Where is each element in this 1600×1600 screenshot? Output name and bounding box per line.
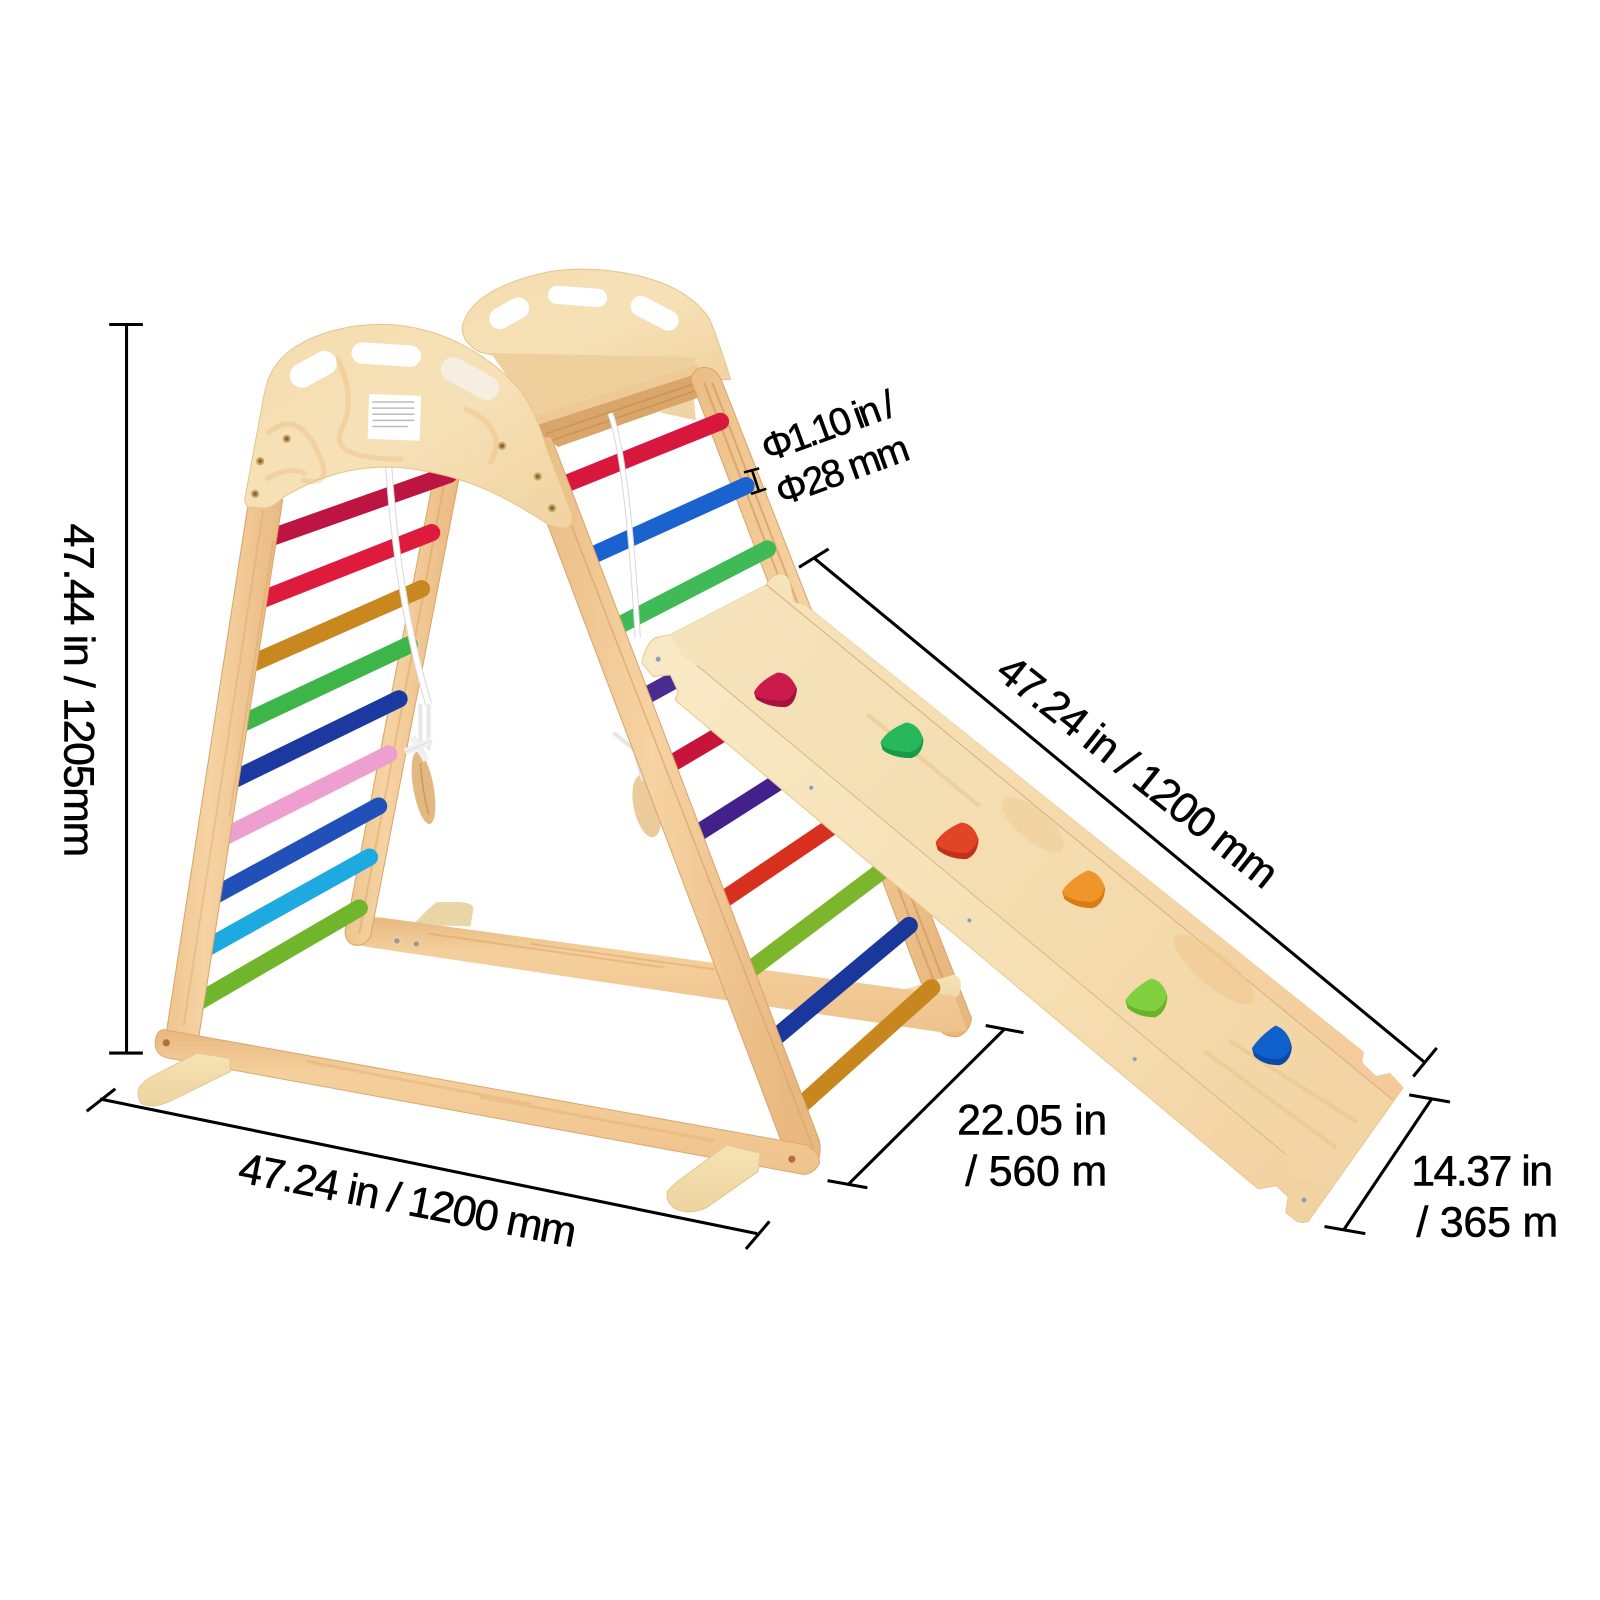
front bottom bar: [155, 1030, 819, 1174]
dimension: height: [54, 324, 143, 1053]
holds: [754, 672, 1292, 1065]
right foot: [667, 1145, 760, 1212]
height label: 47.44 in / 1205mm: [54, 523, 102, 857]
front right leg: [541, 437, 820, 1171]
dimension: base length: [87, 1089, 769, 1257]
hold: red-orange: [936, 822, 979, 859]
depth label: [957, 1097, 1107, 1196]
ramp grain: [867, 714, 1357, 1148]
dimension: depth: [828, 1026, 1107, 1196]
climbing ramp: [642, 574, 1403, 1222]
ramp width label: / 365 m: [1416, 1199, 1558, 1247]
dimension: rung diameter: [744, 383, 915, 515]
right ladder back leg: [691, 367, 971, 1037]
left ring: [407, 750, 440, 826]
depth label: 22.05 in: [957, 1097, 1107, 1145]
ramp width label: [1411, 1148, 1558, 1247]
arch bolts: [252, 436, 555, 511]
left foot: [138, 1053, 231, 1106]
front left leg: [166, 500, 283, 1036]
dimension: ramp length: [799, 549, 1437, 1077]
back bottom bar: [352, 917, 967, 1033]
hold: blue: [1252, 1026, 1292, 1065]
back-right foot: [903, 974, 961, 1010]
ramp screws: [656, 657, 1307, 1203]
ramp width label: 14.37 in: [1411, 1148, 1553, 1196]
right rope and ring: [610, 413, 666, 840]
left ladder back leg: [345, 478, 459, 945]
front arch panel: [245, 324, 573, 529]
ramp length label: 47.24 in / 1200 mm: [988, 646, 1287, 898]
hold: crimson: [754, 672, 797, 707]
ramp upper rail: [766, 574, 1403, 1100]
left rope and ring: [389, 467, 440, 826]
depth label: / 560 m: [965, 1148, 1107, 1196]
left ladder rungs: [191, 474, 449, 1006]
right ring: [627, 772, 666, 840]
hold: orange: [1062, 870, 1105, 908]
rung diameter label: [756, 383, 915, 515]
hold: green: [881, 722, 923, 758]
arch slots: [302, 353, 487, 388]
base length label: 47.24 in / 1200 mm: [235, 1144, 581, 1257]
ramp board outline: [642, 574, 1403, 1222]
rung diameter label: Φ1.10 in /: [756, 383, 901, 471]
hold: lime: [1126, 979, 1167, 1017]
right ladder rungs: [551, 421, 932, 1114]
dimension: ramp width: [1324, 1095, 1558, 1247]
platform deck: [491, 353, 700, 447]
product label: [368, 394, 421, 441]
back foot left: [413, 902, 473, 927]
rung diameter label: Φ28 mm: [770, 427, 915, 515]
ramp climbing surface: [670, 585, 1393, 1193]
back arch panel: [462, 269, 731, 380]
